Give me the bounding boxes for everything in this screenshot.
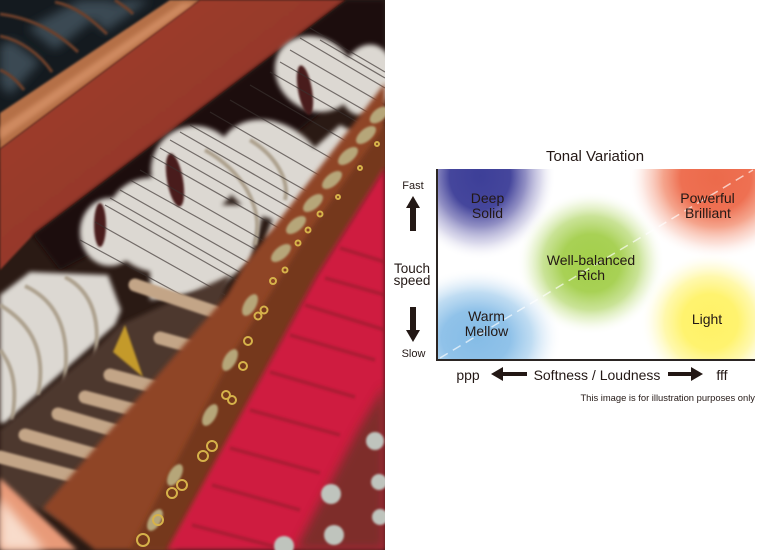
wooden hammer shanks: [0, 275, 230, 520]
axes: [437, 169, 755, 360]
zone: powerful brilliant: [636, 169, 755, 252]
zone: well-balanced rich: [524, 197, 658, 328]
copper frame strip: [0, 0, 200, 149]
y axis labels: Slow: [402, 348, 425, 360]
arrow: down: [406, 307, 420, 342]
arrow: left: [491, 367, 527, 381]
zone labels: Powerful: [680, 190, 735, 206]
zone labels: Brilliant: [685, 205, 731, 221]
zone labels: Solid: [472, 205, 503, 221]
y axis labels: Fast: [402, 180, 424, 192]
x axis labels: Softness / Loudness: [534, 367, 660, 383]
tuning pins, lower right: [295, 385, 385, 550]
zone labels: Mellow: [465, 323, 509, 339]
zone labels: Well-balanced: [547, 252, 635, 268]
y axis labels: Touch: [394, 261, 430, 276]
zone labels: Warm: [468, 308, 505, 324]
dark felt marks: [94, 64, 316, 247]
x axis labels: [456, 367, 728, 383]
x axis labels: fff: [716, 367, 728, 383]
white hammers: [0, 20, 400, 423]
arrow: up: [406, 196, 420, 231]
felt ridges: [192, 248, 385, 548]
red frame face: [0, 0, 346, 270]
zone: deep solid: [438, 169, 549, 252]
brown damper rail: [43, 83, 385, 550]
dark strings area at top left: [0, 0, 200, 115]
dark recess behind hammers: [33, 0, 385, 270]
y axis labels: [394, 180, 430, 360]
disclaimer note: This image is for illustration purposes only: [580, 392, 755, 403]
gold agraffes: [144, 103, 391, 533]
red felt: [167, 167, 385, 550]
zone labels: Deep: [471, 190, 504, 206]
copper highlight, lower left: [0, 478, 77, 550]
color zones: [438, 169, 755, 359]
x axis labels: ppp: [456, 367, 480, 383]
zone labels: Light: [692, 311, 722, 327]
diagonal dashed line: [440, 170, 753, 358]
zone: light: [647, 259, 755, 359]
strings across hammers: [80, 28, 385, 305]
zone labels: [465, 190, 735, 339]
y axis labels: speed: [394, 273, 430, 288]
zone: warm mellow: [438, 276, 552, 359]
chart: tonal variation: [394, 150, 755, 403]
chart title: Tonal Variation: [546, 148, 644, 165]
zone labels: Rich: [577, 267, 605, 283]
hammer folds: [0, 140, 286, 420]
arrow: right: [668, 367, 703, 381]
photo: piano hammers and strings: [0, 0, 400, 550]
